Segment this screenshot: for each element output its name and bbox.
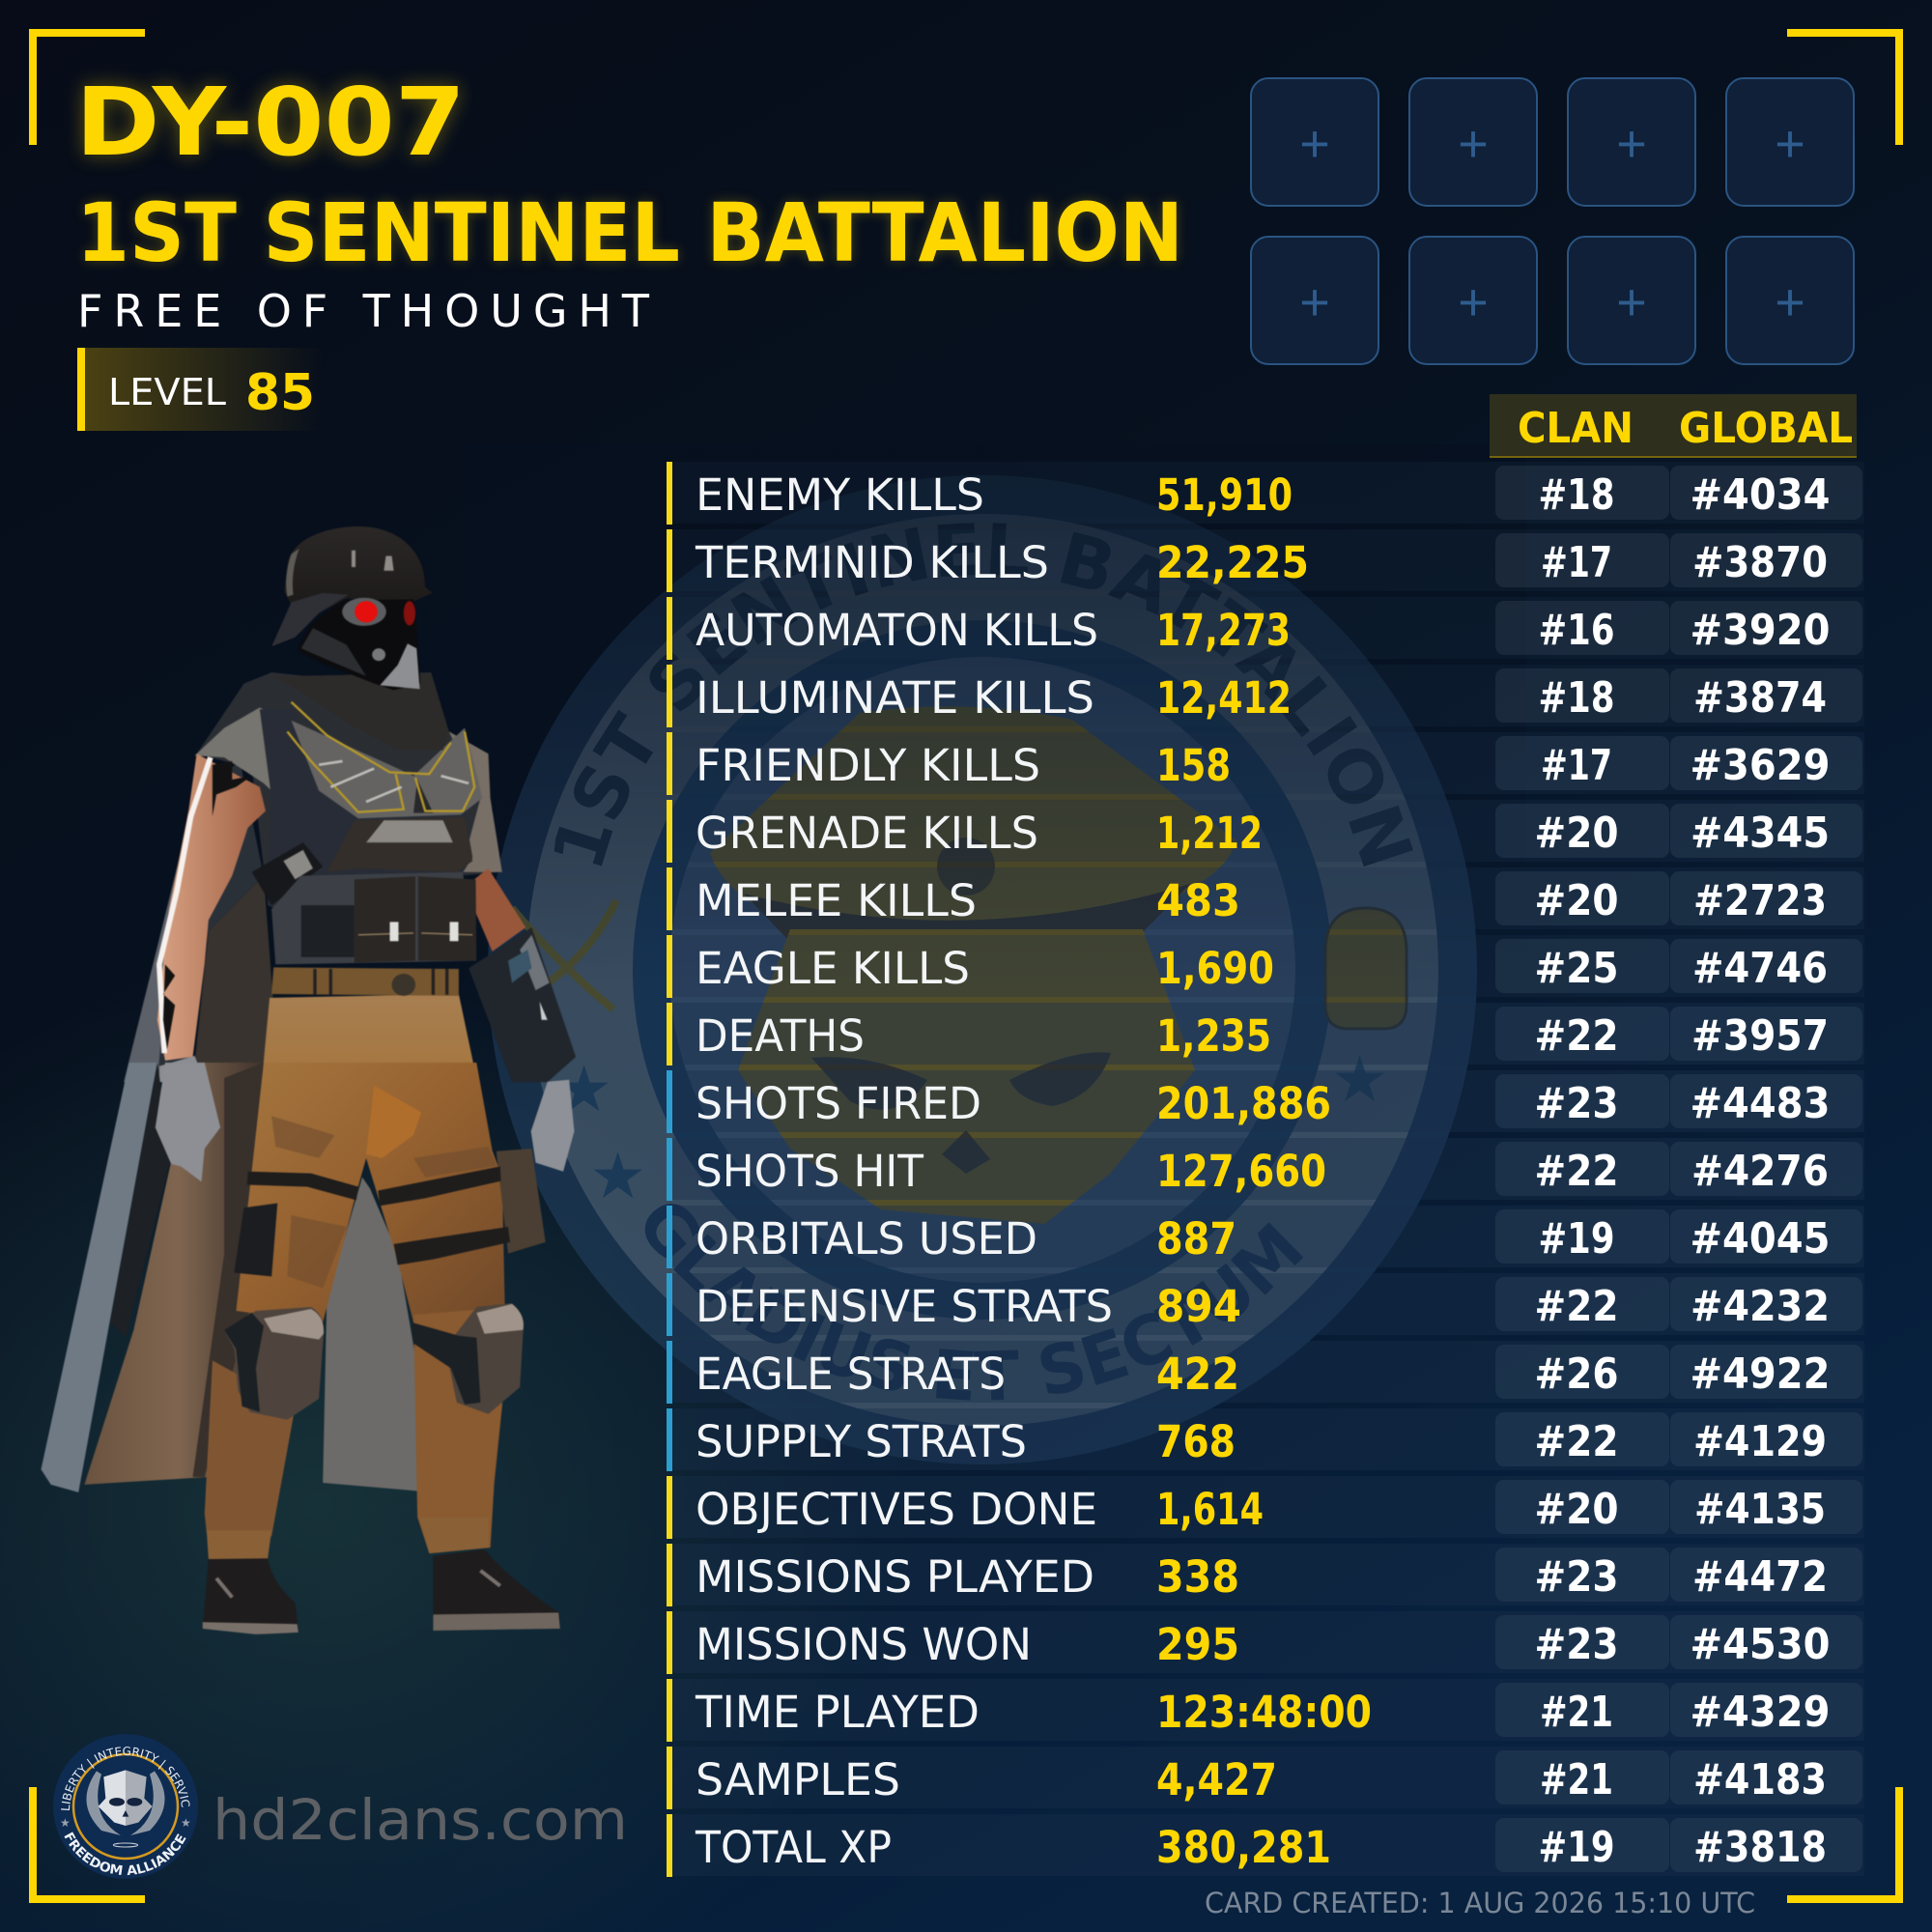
emblem hat: [710, 706, 1236, 939]
row: orbitals used: 887: [1156, 1213, 1236, 1264]
corner bracket bottom left: [29, 1787, 145, 1903]
row: melee kills: [667, 867, 1864, 930]
row: samples: #4183: [1693, 1755, 1827, 1804]
corner bracket top left: [29, 29, 145, 145]
emblem stars: ★: [555, 1052, 612, 1126]
corner bracket top right: [1787, 29, 1903, 145]
row: illuminate kills: #18: [1538, 673, 1615, 723]
row: supply strats: 768: [1156, 1416, 1236, 1467]
row: missions won: MISSIONS WON: [696, 1619, 1032, 1670]
row: missions played: #23: [1534, 1552, 1619, 1602]
row: enemy kills: #4034: [1690, 470, 1830, 520]
row: samples: [667, 1747, 1864, 1809]
row: shots hit: [667, 1138, 1864, 1201]
belt: [271, 967, 459, 996]
row: eagle strats: 422: [1156, 1349, 1239, 1400]
row: shots hit: #22: [1534, 1147, 1619, 1196]
title: callsign: DY-007: [75, 68, 466, 177]
row: total xp: 380,281: [1156, 1822, 1331, 1873]
row: missions won: 295: [1156, 1619, 1239, 1670]
mask: [298, 599, 420, 690]
row: automaton kills: #3920: [1690, 606, 1830, 655]
row: enemy kills: ENEMY KILLS: [696, 469, 984, 521]
row: friendly kills: #17: [1541, 741, 1612, 790]
rank table header: [1490, 394, 1857, 458]
emblem skull: [738, 929, 1195, 1224]
cowl: [271, 674, 449, 750]
row: objectives done: 1,614: [1156, 1484, 1264, 1535]
emblem stars: ★: [589, 1139, 646, 1213]
row: defensive strats: #4232: [1690, 1282, 1830, 1331]
row: defensive strats: #22: [1534, 1282, 1619, 1331]
row: missions won: #4530: [1690, 1620, 1830, 1669]
lower body: [41, 1063, 574, 1634]
medal slots grid: +: [1458, 115, 1489, 173]
row: terminid kills: #3870: [1692, 538, 1828, 587]
right sleeve: [449, 731, 502, 872]
site name: hd2clans.com: [213, 1787, 628, 1853]
badge stars: ★: [60, 1816, 71, 1830]
row: missions played: #4472: [1692, 1552, 1828, 1602]
row: illuminate kills: [667, 665, 1864, 727]
row: shots fired: SHOTS FIRED: [696, 1078, 981, 1129]
row: eagle strats: EAGLE STRATS: [696, 1349, 1006, 1400]
row: eagle strats: [667, 1341, 1864, 1404]
row: orbitals used: [667, 1206, 1864, 1268]
emblem ring text top: 1ST SENTINEL BATTALION: [554, 523, 1413, 867]
corner bracket bottom right: [1787, 1787, 1903, 1903]
left arm: [157, 753, 266, 1061]
row: eagle kills: 1,690: [1156, 943, 1274, 994]
row: objectives done: [667, 1476, 1864, 1539]
row: time played: [667, 1679, 1864, 1742]
row: automaton kills: AUTOMATON KILLS: [696, 605, 1098, 656]
level value: 85: [245, 364, 315, 422]
eye left: [342, 598, 386, 626]
row: deaths: #3957: [1691, 1011, 1829, 1061]
watermark emblem: 1st Sentinel Battalion: [488, 475, 1477, 1464]
right arm: [465, 868, 526, 952]
left glove top: [159, 1056, 205, 1082]
chest plate: [366, 820, 453, 842]
row: shots hit: #4276: [1691, 1147, 1829, 1196]
medal slots grid: [1251, 78, 1854, 364]
badge name: FREEDOM ALLIANCE: [64, 1832, 185, 1876]
row: missions won: #23: [1534, 1620, 1619, 1669]
row: shots fired: #4483: [1690, 1079, 1830, 1128]
cape lining: [84, 1063, 271, 1485]
row: automaton kills: 17,273: [1156, 605, 1291, 656]
row: samples: SAMPLES: [696, 1754, 900, 1805]
row: total xp: #3818: [1693, 1823, 1827, 1872]
chest scribbles: [319, 761, 469, 802]
emblem top fade: [464, 444, 1526, 985]
row: shots hit: SHOTS HIT: [696, 1146, 923, 1197]
level badge: [77, 348, 324, 431]
eye right: [404, 601, 415, 625]
row: samples: #21: [1540, 1755, 1613, 1804]
row: enemy kills: #18: [1538, 470, 1615, 520]
row: eagle kills: [667, 935, 1864, 998]
emblem crossed swords: [512, 900, 616, 1009]
medal slots grid: +: [1616, 273, 1647, 331]
row: time played: #21: [1540, 1688, 1613, 1737]
row: illuminate kills: #3874: [1693, 673, 1827, 723]
medal slots grid: +: [1775, 115, 1805, 173]
row: enemy kills: 51,910: [1156, 469, 1293, 521]
row: grenade kills: 1,212: [1156, 808, 1263, 859]
row: objectives done: OBJECTIVES DONE: [696, 1484, 1097, 1535]
badge stars: ★: [181, 1816, 191, 1830]
row: orbitals used: #19: [1538, 1214, 1615, 1264]
row: enemy kills: [667, 462, 1864, 525]
row: supply strats: #4129: [1693, 1417, 1827, 1466]
row: eagle kills: EAGLE KILLS: [696, 943, 970, 994]
medal slots grid: +: [1299, 273, 1330, 331]
row: objectives done: #4135: [1694, 1485, 1826, 1534]
pouches: [355, 876, 415, 962]
holster left: [234, 1204, 277, 1276]
row: grenade kills: GRENADE KILLS: [696, 808, 1038, 859]
soldier figure: [41, 526, 576, 1634]
lower left leg: [205, 1360, 296, 1536]
row: melee kills: 483: [1156, 875, 1240, 926]
row: automaton kills: [667, 597, 1864, 660]
row: time played: #4329: [1690, 1688, 1830, 1737]
yellow chest lines: [287, 702, 474, 812]
row: time played: 123:48:00: [1156, 1687, 1372, 1738]
row: orbitals used: ORBITALS USED: [696, 1213, 1037, 1264]
row: grenade kills: #4345: [1690, 809, 1830, 858]
row: grenade kills: [667, 800, 1864, 863]
respirator: [380, 643, 420, 689]
abdomen: [271, 872, 476, 964]
heading: clan name: 1ST SENTINEL BATTALION: [76, 185, 1183, 280]
helmet: [271, 526, 433, 646]
row: friendly kills: [667, 732, 1864, 795]
level label: LEVEL: [108, 371, 226, 413]
row: illuminate kills: 12,412: [1156, 672, 1292, 724]
row: terminid kills: [667, 529, 1864, 592]
row: supply strats: #22: [1534, 1417, 1619, 1466]
row: friendly kills: 158: [1156, 740, 1231, 791]
holster right: [497, 1149, 546, 1254]
row: shots fired: #23: [1534, 1079, 1619, 1128]
row: grenade kills: #20: [1534, 809, 1619, 858]
footer: card created timestamp: CARD CREATED: 1 AUG 2026 15:10 UTC: [1205, 1887, 1755, 1919]
thigh straps: [247, 1172, 358, 1200]
row: total xp: [667, 1814, 1864, 1877]
row: missions played: [667, 1544, 1864, 1606]
row: deaths: #22: [1534, 1011, 1619, 1061]
row: automaton kills: #16: [1538, 606, 1615, 655]
row: total xp: TOTAL XP: [695, 1822, 892, 1873]
badge motto: LIBERTY | INTEGRITY | SERVICE: [61, 1747, 189, 1810]
medal slots grid: +: [1616, 115, 1647, 173]
row: friendly kills: FRIENDLY KILLS: [696, 740, 1040, 791]
row: time played: TIME PLAYED: [695, 1687, 980, 1738]
row: missions played: MISSIONS PLAYED: [696, 1551, 1094, 1603]
buckle strap: [252, 842, 323, 905]
row: shots fired: 201,886: [1156, 1078, 1331, 1129]
upper body: [124, 526, 576, 1082]
gauntlet: [469, 927, 576, 1082]
knee pads: [224, 1307, 324, 1420]
emblem ring text bottom: GLADIUS ET SECTUM: [645, 1204, 1303, 1401]
cape outer: [41, 1063, 157, 1492]
row: melee kills: #2723: [1693, 876, 1827, 925]
row: defensive strats: [667, 1273, 1864, 1336]
row: deaths: DEATHS: [696, 1010, 865, 1062]
subtitle: motto: FREE OF THOUGHT: [77, 285, 650, 337]
row: shots hit: 127,660: [1156, 1146, 1326, 1197]
row: eagle strats: #4922: [1690, 1350, 1830, 1399]
row: eagle strats: #26: [1534, 1350, 1619, 1399]
thigh left and pelvis: [236, 1063, 505, 1322]
row: supply strats: [667, 1408, 1864, 1471]
emblem stars: ★: [1331, 1042, 1388, 1117]
medal slots grid: +: [1299, 115, 1330, 173]
row: supply strats: SUPPLY STRATS: [696, 1416, 1027, 1467]
row: eagle kills: #25: [1534, 944, 1619, 993]
row: deaths: 1,235: [1156, 1010, 1271, 1062]
row: defensive strats: 894: [1156, 1281, 1241, 1332]
row: total xp: #19: [1538, 1823, 1615, 1872]
clan header: CLAN: [1518, 404, 1634, 453]
left sleeve: [195, 707, 296, 810]
trousers top: [262, 994, 477, 1082]
cape inner wool: [323, 1178, 419, 1492]
row: eagle kills: #4746: [1692, 944, 1828, 993]
emblem grenade: [1325, 908, 1406, 1029]
badge skull: [86, 1770, 165, 1847]
hd2clans badge: Freedom Alliance: [53, 1734, 198, 1879]
gloves: [156, 1063, 220, 1181]
medal slots grid: +: [1775, 273, 1805, 331]
global header: GLOBAL: [1679, 404, 1853, 453]
row: melee kills: MELEE KILLS: [696, 875, 977, 926]
row: shots fired: [667, 1070, 1864, 1133]
boots: [203, 1558, 298, 1634]
medal slots grid: +: [1458, 273, 1489, 331]
row: missions won: [667, 1611, 1864, 1674]
row: deaths: [667, 1003, 1864, 1065]
row: terminid kills: #17: [1541, 538, 1612, 587]
row: missions played: 338: [1156, 1551, 1239, 1603]
row: objectives done: #20: [1534, 1485, 1619, 1534]
lower right leg: [413, 1307, 508, 1553]
torso armor: [260, 709, 472, 920]
row: terminid kills: TERMINID KILLS: [695, 537, 1049, 588]
row: melee kills: #20: [1534, 876, 1619, 925]
row: terminid kills: 22,225: [1156, 537, 1309, 588]
row: illuminate kills: ILLUMINATE KILLS: [696, 672, 1094, 724]
row: orbitals used: #4045: [1690, 1214, 1830, 1264]
row: defensive strats: DEFENSIVE STRATS: [696, 1281, 1113, 1332]
row: samples: 4,427: [1156, 1754, 1277, 1805]
row: friendly kills: #3629: [1690, 741, 1830, 790]
